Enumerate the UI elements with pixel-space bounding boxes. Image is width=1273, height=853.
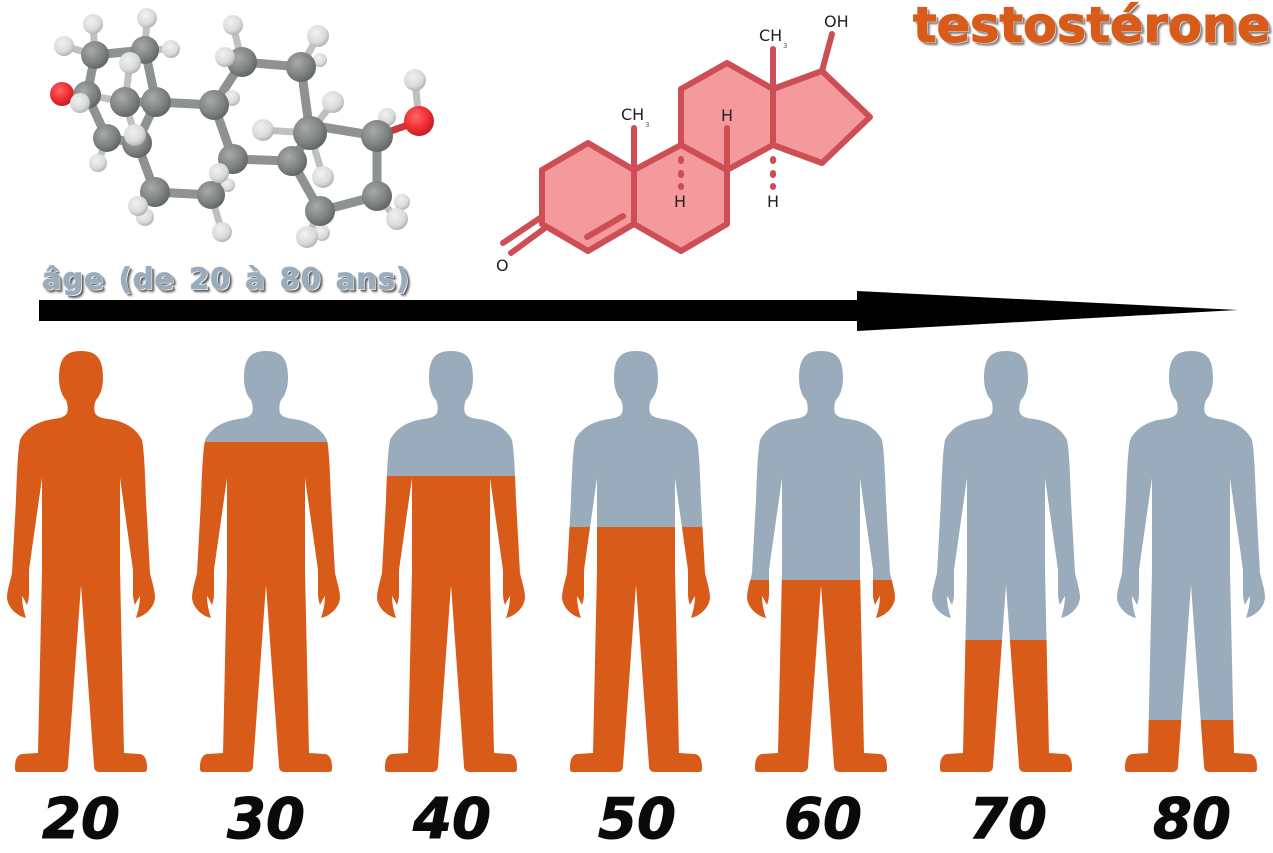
oxygen atom right: [404, 106, 434, 136]
atom labels: [496, 12, 849, 275]
age number 50: 50: [598, 787, 676, 852]
atom labels: 3: [645, 121, 649, 129]
age number 70: 70: [969, 787, 1047, 852]
person 60: [747, 351, 895, 772]
atom labels: OH: [824, 12, 849, 31]
person 20: [7, 351, 155, 772]
carbon atoms: [73, 36, 393, 226]
atom labels: H: [674, 192, 686, 211]
hydrogen bonds: [64, 18, 419, 237]
atom labels: O: [496, 256, 509, 275]
age number 60: 60: [784, 787, 862, 852]
atom labels: CH: [621, 105, 644, 124]
carbon skeleton bonds: [87, 50, 377, 211]
ring fill: [542, 63, 870, 251]
atom labels: H: [721, 106, 733, 125]
oxygen bond: [377, 121, 419, 136]
skeletal formula of testosterone: [496, 12, 870, 275]
ring bonds: [503, 34, 870, 253]
person 80: [1117, 351, 1265, 772]
age number 80: 80: [1153, 787, 1231, 852]
person 70: [932, 351, 1080, 772]
atom labels: CH: [759, 26, 782, 45]
age arrow: [39, 291, 1238, 331]
person 40: [377, 351, 525, 772]
atom labels: 3: [783, 42, 787, 50]
age axis label: âge (de 20 à 80 ans): [42, 262, 410, 296]
person 30: [192, 351, 340, 772]
front hydrogen atoms: [70, 47, 235, 216]
age number 20: 20: [42, 787, 120, 852]
oxygen atom left: [50, 82, 74, 106]
hashed stereo bonds: [678, 156, 776, 190]
age number 40: 40: [413, 787, 491, 852]
back hydrogen atoms: [54, 8, 426, 248]
age number 30: 30: [227, 787, 305, 852]
3D ball-and-stick molecule model: [50, 8, 434, 248]
person 50: [562, 351, 710, 772]
atom labels: H: [767, 192, 779, 211]
